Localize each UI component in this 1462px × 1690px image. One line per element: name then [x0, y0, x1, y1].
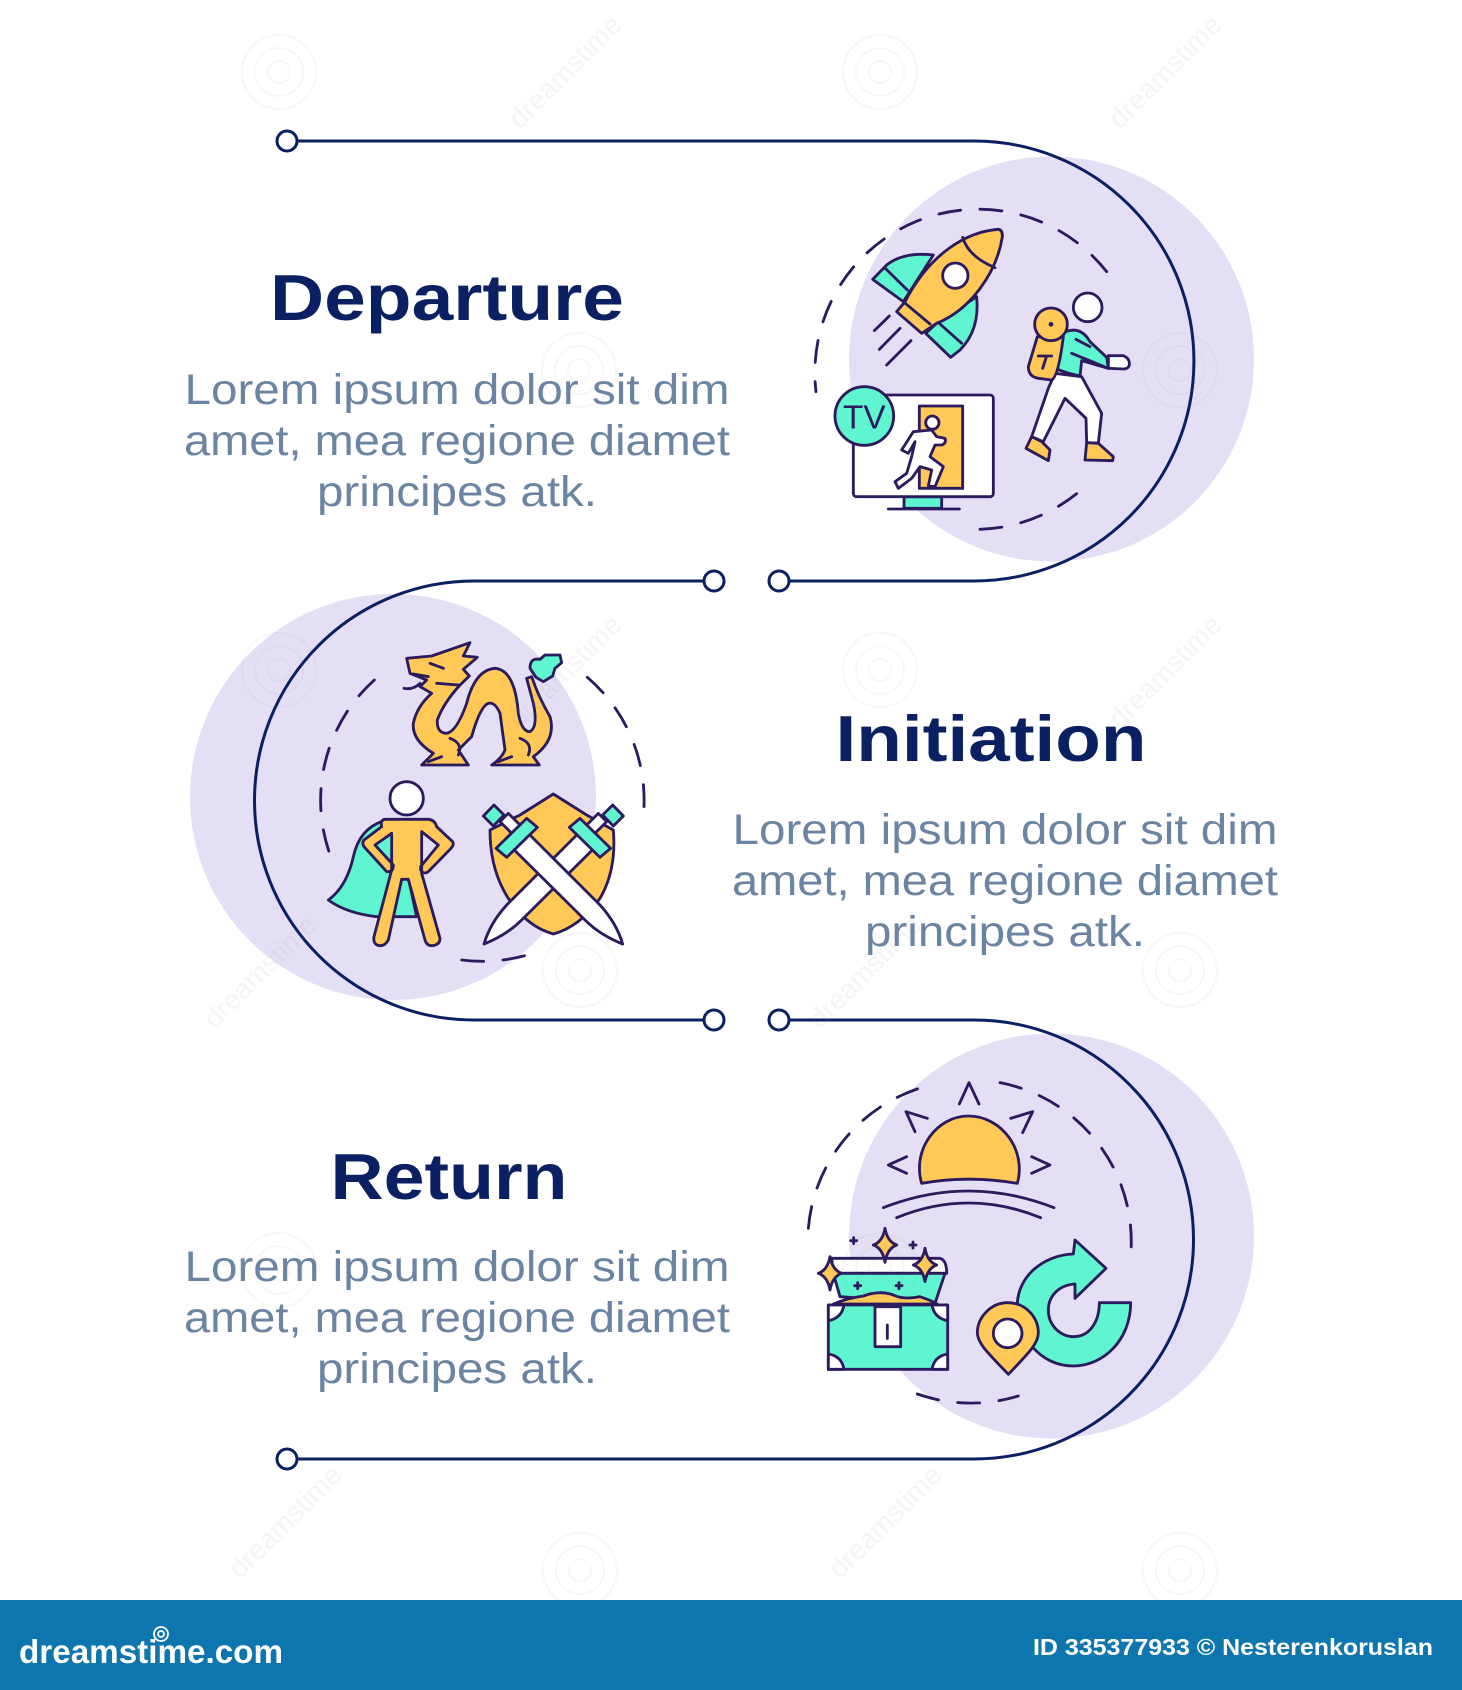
icon: rising sun: [883, 1083, 1054, 1218]
watermark text: dreamstime: [822, 1459, 948, 1584]
dashed ring: Initiation: [321, 677, 644, 961]
logo spiral: [154, 1627, 168, 1641]
text block: Departure: principes atk.: [317, 468, 597, 516]
text block: Initiation: amet, mea regione diamet: [732, 857, 1278, 905]
end node: Departure: [769, 571, 789, 591]
text block: Initiation: [732, 806, 1278, 956]
text block: Return: Lorem ipsum dolor sit dim: [184, 1243, 730, 1291]
lavender circle: Departure: [849, 156, 1254, 562]
icon: rocket: [873, 229, 1002, 365]
heading: Initiation: Initiation: [836, 702, 1146, 775]
watermark text: dreamstime: [502, 9, 628, 134]
watermark text: dreamstime: [1102, 609, 1228, 734]
footer logo: dreamstime.com: [19, 1633, 283, 1670]
panel: Departure: [184, 131, 1254, 591]
icon: return arrow with location pin: [977, 1240, 1131, 1374]
footer bar: [0, 1600, 1462, 1690]
TV label: TV: [843, 399, 886, 436]
watermark text: dreamstime: [197, 909, 323, 1034]
end node: Return: [277, 1449, 297, 1469]
panel: Initiation: [190, 571, 1278, 1030]
text block: Initiation: principes atk.: [865, 908, 1145, 956]
dashed ring: Return: [808, 1083, 1131, 1403]
text block: Initiation: Lorem ipsum dolor sit dim: [732, 806, 1278, 854]
text block: Return: [184, 1243, 730, 1393]
watermark spirals: [242, 35, 1217, 1607]
icon: caped hero: [328, 782, 453, 946]
icon: shield and crossed swords: [483, 794, 623, 944]
image credit: ID 335377933 © Nesterenkoruslan: [1033, 1634, 1433, 1660]
connector line: Departure: [297, 141, 1194, 581]
heading: Return: Return: [330, 1140, 568, 1213]
text block: Return: principes atk.: [317, 1345, 597, 1393]
text block: Departure: amet, mea regione diamet: [184, 417, 730, 465]
text block: Departure: [184, 366, 730, 516]
icon group: Return: [808, 1083, 1131, 1403]
icon: treasure chest: [818, 1228, 948, 1369]
lavender circle: Return: [849, 1034, 1254, 1438]
end node: Initiation: [704, 1010, 724, 1030]
text block: Return: amet, mea regione diamet: [184, 1294, 730, 1342]
watermark text: dreamstime: [222, 1459, 348, 1584]
lavender circle: Initiation: [190, 594, 596, 1000]
icon: television: [835, 387, 993, 509]
watermark text: dreamstime: [1102, 9, 1228, 134]
watermark text: [197, 9, 1228, 1584]
watermark text: dreamstime: [502, 609, 628, 734]
text block: Departure: Lorem ipsum dolor sit dim: [184, 366, 730, 414]
heading: Departure: Departure: [270, 261, 624, 334]
start node: Return: [769, 1010, 789, 1030]
watermark text: dreamstime: [802, 909, 928, 1034]
start node: Initiation: [704, 571, 724, 591]
icon: dragon: [404, 643, 562, 765]
icon group: Departure: [815, 209, 1129, 529]
connector line: Return: [297, 1020, 1194, 1459]
panel: Return: [184, 1010, 1254, 1469]
icon: hiker: [1026, 293, 1129, 461]
dashed ring: Departure: [815, 209, 1107, 529]
icon group: Initiation: [321, 643, 644, 961]
start node: Departure: [277, 131, 297, 151]
connector line: Initiation: [255, 581, 704, 1020]
